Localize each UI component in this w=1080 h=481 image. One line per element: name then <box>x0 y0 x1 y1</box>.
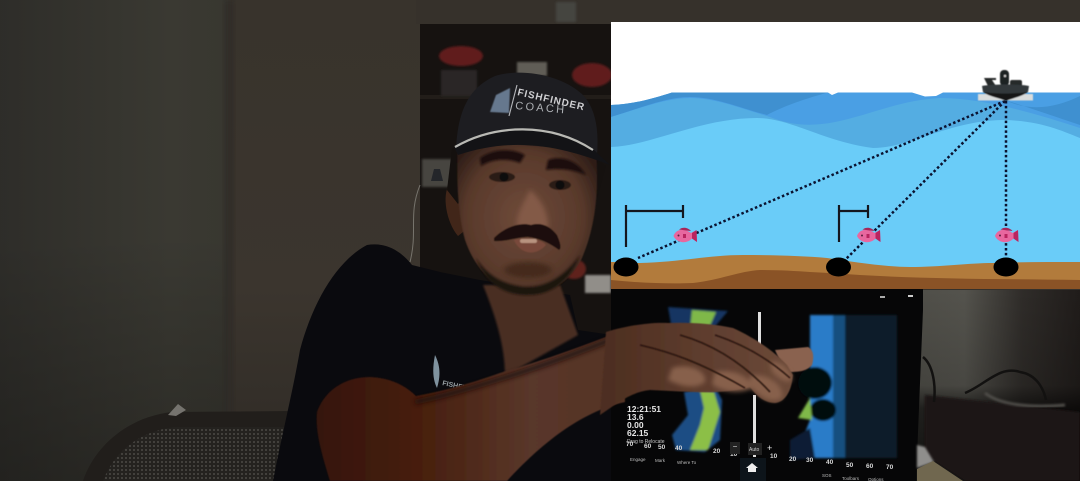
readouts: 12:21:51 <box>627 404 661 414</box>
right eye <box>549 180 571 190</box>
range scale: 50 <box>846 462 854 469</box>
power strip <box>985 393 1065 406</box>
sonar left <box>668 307 728 452</box>
range scale: 70 <box>886 464 894 471</box>
left brow <box>480 150 525 166</box>
toolbar: SOS <box>822 473 832 478</box>
zoom controls: − <box>733 442 738 451</box>
water: middle wave <box>611 98 1080 180</box>
nose <box>517 190 548 231</box>
zoom controls: Auto <box>749 447 760 453</box>
fingers highlight <box>668 362 792 400</box>
bottom returns <box>614 258 1018 276</box>
shirt logo <box>433 355 470 393</box>
person <box>273 73 612 481</box>
range scale: 40 <box>826 459 834 466</box>
jaw beard <box>476 255 580 295</box>
shirt <box>273 244 612 481</box>
hair <box>447 148 486 204</box>
background shelf <box>410 24 612 344</box>
range scale: 20 <box>713 448 721 455</box>
range scale: 50 <box>658 444 666 451</box>
hat crown <box>456 73 598 156</box>
boat <box>978 70 1033 101</box>
table edge <box>917 461 963 481</box>
sonar beam lines <box>638 101 1006 259</box>
toolbar: Toolbars <box>842 476 860 481</box>
hand and forearm <box>317 323 813 481</box>
zoom controls: + <box>767 443 772 453</box>
range scale: 70 <box>626 441 634 448</box>
water: back wave <box>611 92 828 117</box>
readouts: 13.6 <box>627 412 644 422</box>
right hair <box>584 150 606 212</box>
finger creases <box>640 335 790 392</box>
bracket: short distance <box>839 205 868 242</box>
water: front wave <box>611 118 1080 289</box>
hat logo: FISHFINDER <box>516 87 586 113</box>
fish: left <box>674 228 697 242</box>
range scale: 40 <box>675 445 683 452</box>
desk box <box>925 395 1080 481</box>
lower lip shadow <box>504 262 552 278</box>
range scale: 10 <box>770 453 778 460</box>
toolbar: Mark <box>655 458 666 463</box>
water: surface <box>611 92 1080 289</box>
sonar right <box>790 315 897 460</box>
mouth <box>514 238 546 252</box>
range scale: 30 <box>806 457 814 464</box>
range scale: 60 <box>644 443 652 450</box>
range scale: 10 <box>730 451 738 458</box>
fish: middle <box>857 228 880 242</box>
zoom controls <box>730 442 772 455</box>
forearm <box>317 331 625 481</box>
wrist shadow <box>415 336 620 402</box>
dark sand <box>611 270 1080 289</box>
bracket: long distance <box>626 205 683 247</box>
hat logo: COACH <box>515 100 565 116</box>
readouts <box>627 404 661 438</box>
teeth <box>520 239 537 243</box>
range scale <box>626 441 894 471</box>
mustache <box>494 224 560 250</box>
icon: home <box>740 458 766 481</box>
fish: right <box>995 228 1018 242</box>
right side desk and cables <box>917 357 1080 481</box>
shirt logo: FISHFIN <box>442 380 470 393</box>
readouts: 62.15 <box>627 428 649 438</box>
range scale: 60 <box>866 463 874 470</box>
neck <box>483 285 578 376</box>
diagram: side view of sonar beams <box>611 22 1080 289</box>
hat logo <box>490 85 586 116</box>
drag hint: Drag to Relocate <box>627 439 665 445</box>
cables <box>923 357 1046 402</box>
water: back wave right <box>1005 96 1080 125</box>
toolbar: Engage <box>630 457 646 462</box>
center line <box>758 312 761 372</box>
sand <box>611 255 1080 289</box>
left eye <box>489 172 515 182</box>
range scale: 20 <box>789 456 797 463</box>
hat white cord <box>455 129 593 150</box>
fishfinder monitor <box>611 289 923 481</box>
right brow <box>546 158 586 175</box>
hand back <box>600 323 793 415</box>
finger behind <box>775 347 813 372</box>
face <box>457 140 597 295</box>
readouts: 0.00 <box>627 420 644 430</box>
left ear <box>446 185 468 236</box>
chair back <box>83 404 295 481</box>
hat brim <box>454 130 610 165</box>
toolbar: Where To <box>677 460 697 465</box>
sky panel <box>611 22 1080 289</box>
white object <box>917 445 934 468</box>
toolbar <box>630 457 884 481</box>
